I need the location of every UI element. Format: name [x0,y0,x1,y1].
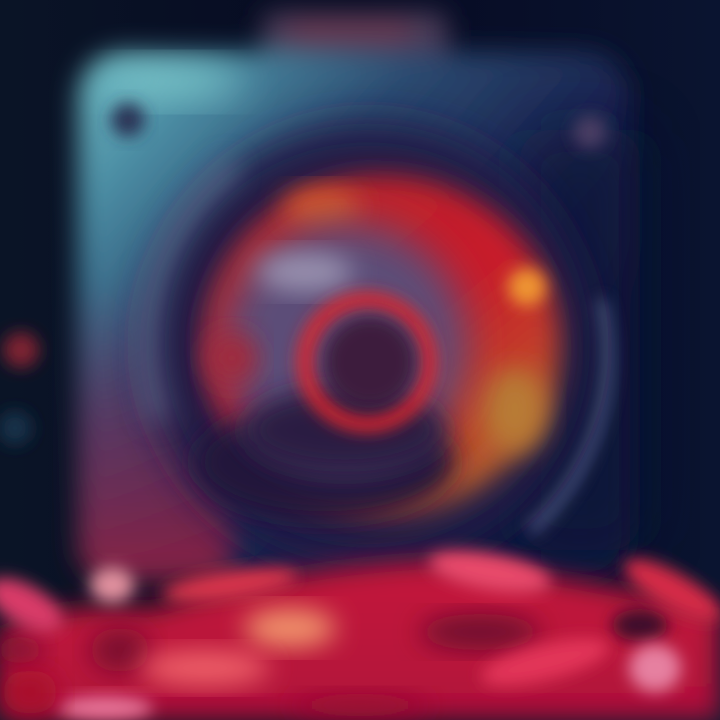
red inner ring [305,300,429,424]
golden highlight centre [244,608,336,648]
pink piece left [0,567,71,643]
orange glint top [284,188,360,228]
side light red [3,332,39,368]
piece lower right [477,629,613,695]
dark red left bottom [2,670,58,714]
inner grey highlight [257,252,353,292]
left red patch [206,332,258,384]
camera body [78,12,630,582]
lens assembly [146,123,607,567]
lens centre [324,316,416,408]
inner dark shadow [245,388,445,472]
screw top right [573,115,607,149]
body shell [78,52,630,582]
pile base [0,560,720,720]
yellow glint right [508,268,546,306]
red pile [0,544,720,720]
dark lower crescent [195,404,455,520]
red disc [204,175,560,515]
left ring highlight [146,165,235,420]
piece right [615,547,720,633]
highlight piece top centre [426,544,554,600]
lens housing [146,123,590,567]
right body shadow [520,130,640,550]
pale pink piece right [629,644,681,692]
piece top mid-left [161,562,299,608]
pink piece bottom left [57,696,153,720]
top shutter bump [262,12,448,60]
screw top left [111,103,145,137]
inner grey ring [223,223,467,467]
bump highlight [290,22,410,40]
glowing piece lower left [140,650,270,686]
dark gaps between pieces [420,614,540,650]
pale piece [90,567,134,603]
lower body tint [78,280,228,580]
side light blue [0,411,32,445]
amber lower right [483,368,547,452]
outer lens ring [530,300,607,530]
teal top-left highlight [105,64,245,100]
